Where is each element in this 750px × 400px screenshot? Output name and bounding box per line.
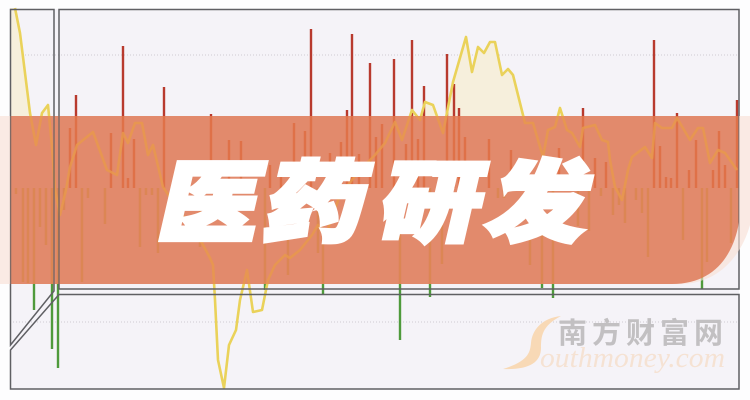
watermark Chinese name: 南方财富网 bbox=[558, 317, 723, 350]
title: 研 bbox=[372, 155, 494, 253]
bar chart: upward red bars bbox=[70, 29, 737, 188]
frame: left zoom box bbox=[10, 10, 54, 345]
frame: main upper chart bbox=[59, 10, 739, 289]
title: 医 bbox=[151, 155, 273, 253]
bar chart: downward bars bbox=[16, 188, 731, 368]
frame: lower chart bbox=[10, 294, 739, 389]
banner: main orange band bbox=[10, 116, 739, 284]
line chart: area fill bbox=[10, 8, 615, 188]
watermark: southmoney logo bbox=[503, 316, 725, 374]
watermark domain: outhmoney.com bbox=[540, 342, 725, 374]
icon: S swoosh bbox=[503, 316, 561, 369]
title: 药 bbox=[257, 155, 379, 253]
title bbox=[151, 155, 601, 253]
title: 发 bbox=[479, 155, 601, 253]
banner: pale outer band bbox=[0, 116, 750, 284]
banner: chart showing through bbox=[10, 116, 739, 284]
